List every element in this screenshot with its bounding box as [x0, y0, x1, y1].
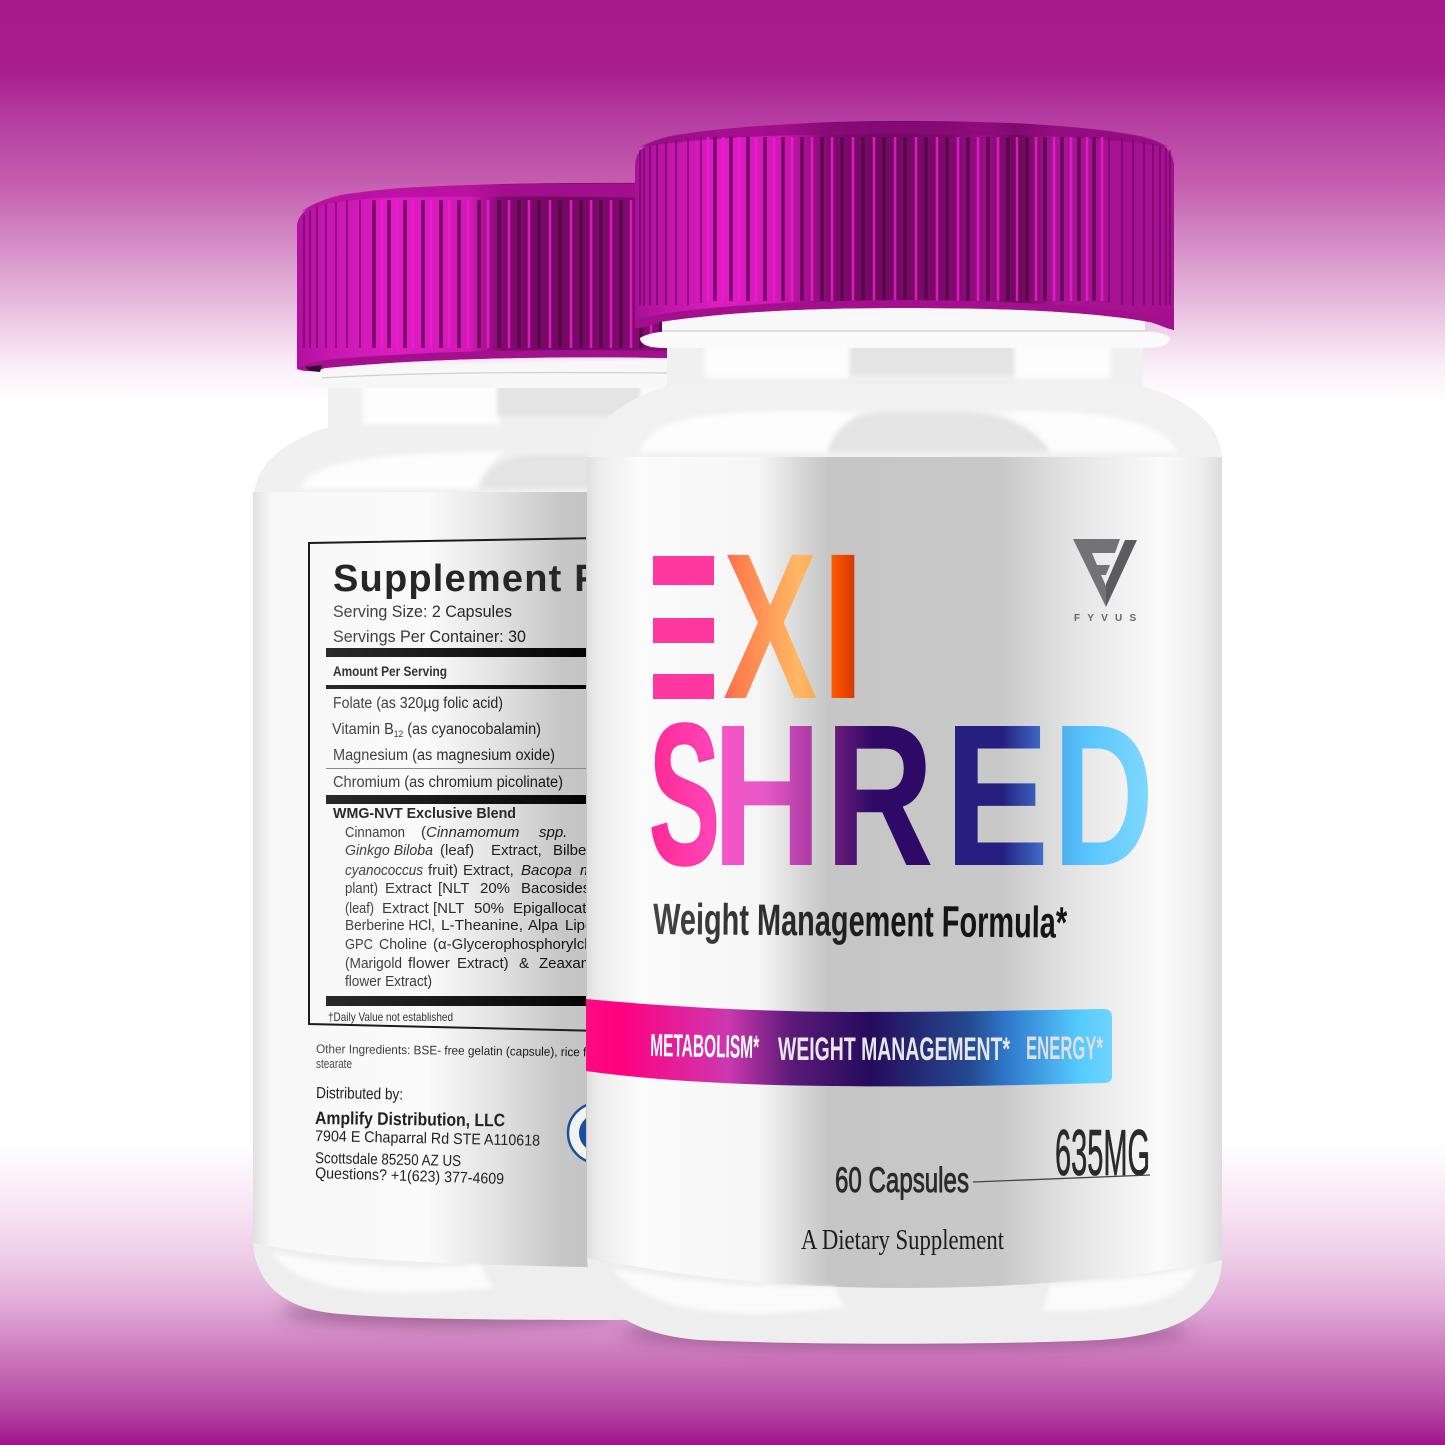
blend ingredients: Zeaxanthin	[539, 955, 613, 972]
blend ingredients: Bacosides]	[521, 880, 594, 897]
blend ingredients: Bilberry	[553, 842, 604, 859]
product name SHRED: R	[825, 682, 934, 908]
distributor	[315, 1085, 540, 1188]
blend ingredients: 20%	[480, 880, 510, 897]
dietary supplement note: A Dietary Supplement	[801, 1225, 1004, 1256]
brand logo FYVUS: FYVUS	[1074, 613, 1143, 624]
blend ingredients: (Marigold	[345, 955, 402, 972]
distributor: 7904 E Chaparral Rd STE A110618	[315, 1128, 540, 1150]
product name SHRED: S	[649, 683, 720, 908]
exclusive blend: WMG-NVT Exclusive Blend	[333, 805, 516, 822]
blend ingredients: Ginkgo Biloba	[345, 842, 433, 859]
back bottle cap	[297, 183, 668, 372]
supplement heading: Supplement Facts	[333, 558, 680, 600]
blend ingredients: [NLT	[438, 880, 469, 897]
capsule count: 60 Capsules	[835, 1161, 969, 1200]
blend ingredients	[345, 826, 586, 989]
product name SHRED: E	[944, 683, 1049, 909]
nutrient rows: Folate (as 320µg folic acid)	[333, 695, 503, 712]
blend ingredients: fruit)	[428, 862, 458, 879]
blend ingredients: Alpa	[528, 917, 558, 934]
blend ingredients: flower	[408, 955, 450, 972]
blend ingredients: Extract	[385, 880, 432, 897]
certification seal	[566, 1104, 586, 1162]
serving info: Servings Per Container: 30	[333, 627, 526, 646]
back bottle base	[253, 1243, 640, 1320]
back bottle body	[253, 492, 640, 1270]
blend ingredients: 50%	[474, 900, 504, 917]
subtitle: Weight Management Formula*	[653, 895, 1068, 948]
benefit labels	[650, 1027, 1103, 1067]
blend ingredients: flower Extract)	[345, 973, 432, 990]
front bottle	[586, 121, 1222, 1346]
blend ingredients: L-Theanine,	[441, 917, 523, 934]
product name SHRED	[649, 682, 1154, 909]
blend ingredients: Lipoic	[565, 917, 605, 934]
blend ingredients: Extract	[382, 900, 429, 917]
other ingredients: Other Ingredients: BSE- free gelatin (capsule), rice flour	[316, 1042, 606, 1060]
brand logo FYVUS	[1073, 539, 1143, 624]
blend ingredients: spp.	[539, 824, 567, 841]
nutrient rows: (as cyanocobalamin)	[403, 721, 541, 738]
stylised E	[653, 556, 714, 699]
other ingredients: stearate	[316, 1057, 352, 1071]
front bottle: 635MG	[1055, 1116, 1150, 1189]
front bottle neck	[640, 306, 1170, 390]
stylised E: E	[621, 511, 721, 743]
product name SHRED: D	[1053, 683, 1154, 908]
blend ingredients: cyanococcus	[345, 862, 423, 879]
blend ingredients: [NLT	[433, 900, 464, 917]
front bottle body	[587, 457, 1222, 1290]
product name EXI	[653, 554, 854, 699]
nutrient rows: Vitamin B	[332, 721, 398, 738]
product name SHRED: H	[712, 682, 822, 908]
nutrient rows: 12	[394, 729, 403, 739]
blend ingredients: (α-Glycerophosphorylcholine)	[433, 936, 629, 953]
blend ingredients: Extract,	[463, 862, 514, 879]
dosage underline	[973, 1175, 1150, 1182]
blend ingredients: (leaf)	[345, 900, 374, 917]
distributor: Scottsdale 85250 AZ US	[315, 1150, 461, 1170]
serving info	[333, 602, 526, 646]
benefit band	[586, 999, 1112, 1086]
front bottle shoulder	[587, 385, 1222, 460]
benefit labels: ENERGY*	[1026, 1030, 1103, 1066]
front bottle cap	[635, 121, 1174, 330]
nutrient rows	[326, 695, 596, 791]
amount per serving: Amount Per Serving	[333, 664, 447, 679]
blend ingredients: Bacopa	[521, 862, 572, 879]
back bottle neck	[305, 360, 668, 435]
back bottle shadow	[280, 1299, 620, 1325]
blend ingredients: Choline	[379, 936, 427, 953]
back bottle shoulder	[254, 428, 640, 494]
blend ingredients: (Cinnamomum	[421, 824, 519, 841]
front bottle shadow	[620, 1318, 1190, 1346]
supplement facts panel	[308, 537, 586, 1185]
nutrient rows: Magnesium (as magnesium oxide)	[333, 747, 555, 764]
distributor: Amplify Distribution, LLC	[315, 1108, 505, 1130]
blend ingredients: monnieri	[580, 862, 638, 879]
blend ingredients: &	[519, 955, 529, 972]
blend ingredients: Extract,	[491, 842, 542, 859]
blend ingredients: plant)	[345, 880, 378, 897]
blend ingredients: Berberine HCl,	[345, 917, 435, 934]
distributor: Distributed by:	[316, 1085, 403, 1104]
blend ingredients: Extract)	[457, 955, 509, 972]
blend ingredients: GPC	[345, 936, 373, 953]
other ingredients	[316, 1044, 586, 1068]
nutrient rows: Chromium (as chromium picolinate)	[333, 774, 563, 791]
blend ingredients: Cinnamon	[345, 824, 405, 841]
back bottle	[253, 183, 680, 1325]
daily value note: †Daily Value not established	[328, 1010, 453, 1024]
product name EXI: I	[821, 511, 865, 743]
product name EXI: X	[723, 510, 817, 742]
benefit labels: WEIGHT MANAGEMENT*	[778, 1031, 1010, 1067]
benefit labels: METABOLISM*	[650, 1027, 760, 1065]
front bottle base	[587, 1258, 1222, 1344]
blend ingredients: (leaf)	[440, 842, 474, 859]
blend ingredients: Epigallocatechin	[513, 900, 622, 917]
serving info: Serving Size: 2 Capsules	[333, 602, 512, 621]
distributor: Questions? +1(623) 377-4609	[315, 1165, 504, 1188]
